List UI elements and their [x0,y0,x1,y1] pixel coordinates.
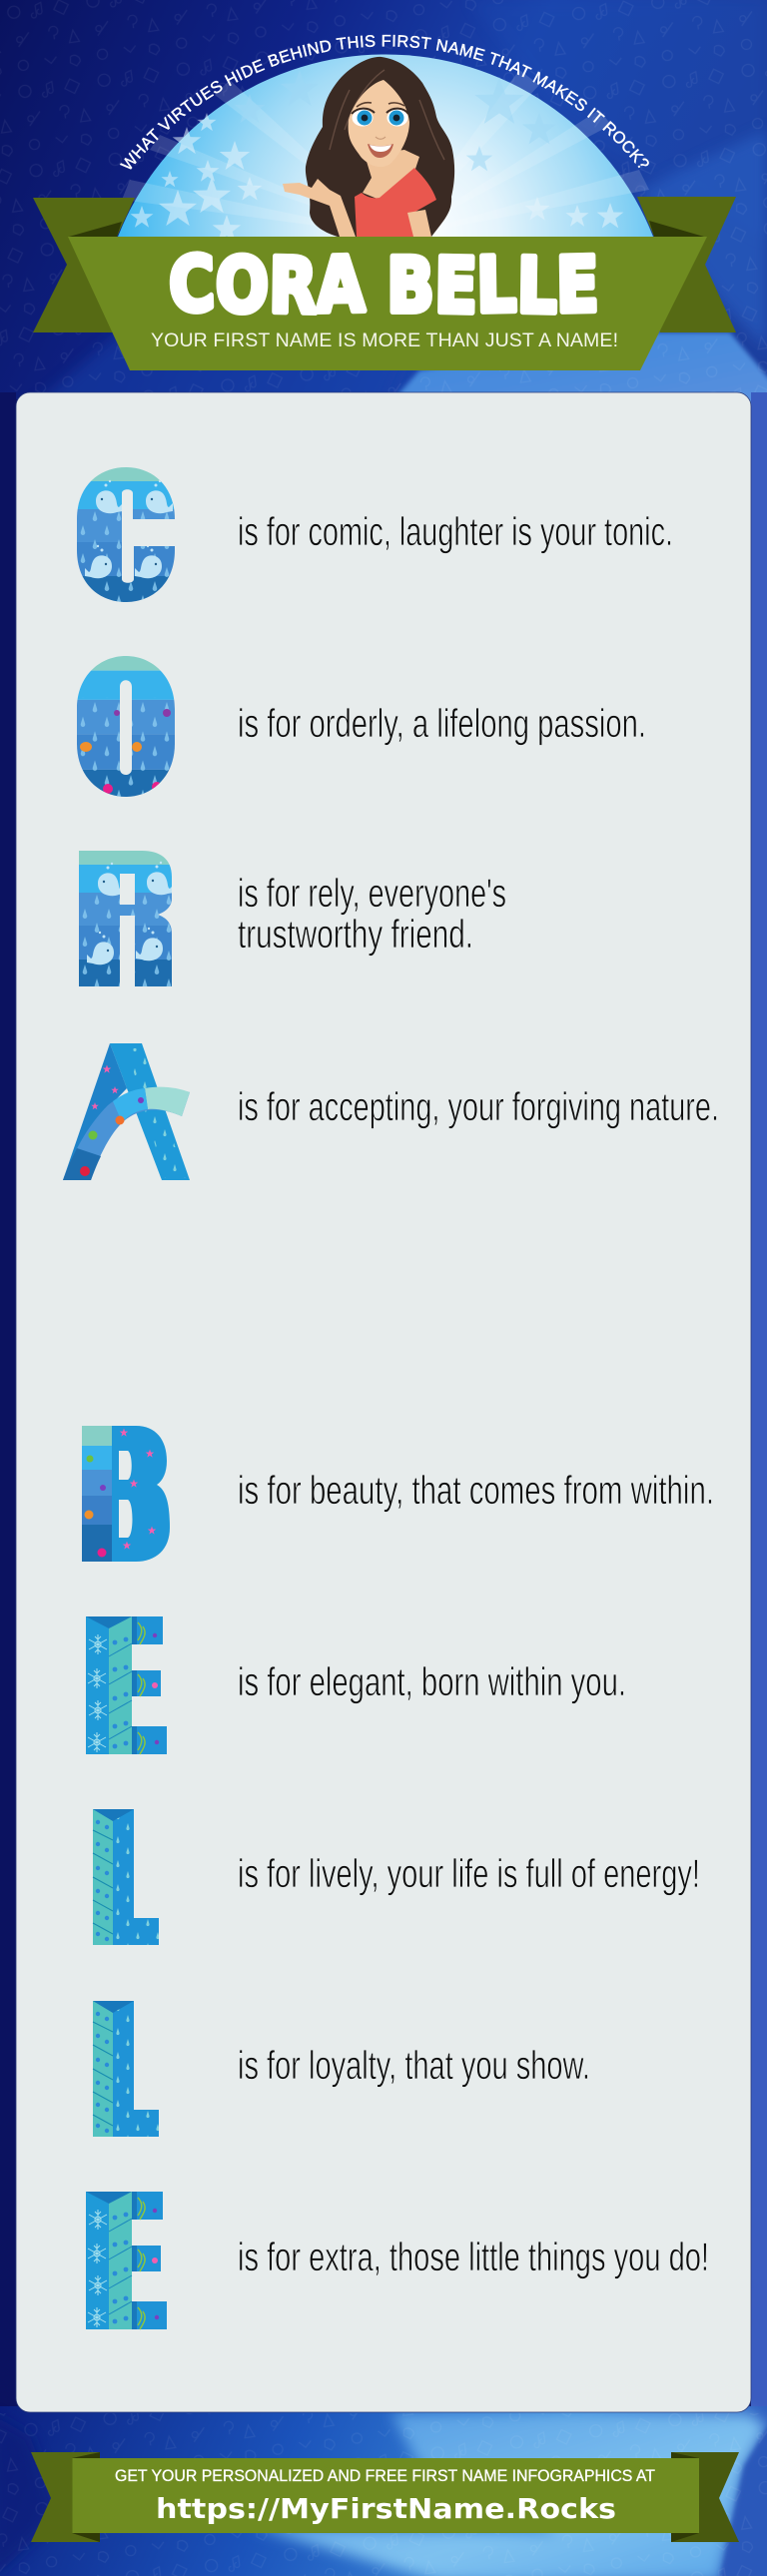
letter E [86,1616,167,1754]
face [349,80,409,167]
smile [368,137,393,158]
letter B [82,1426,170,1562]
letter L [93,1809,159,1945]
letter E (second) [86,2192,167,2329]
text: L second: is for loyalty, that you show. [238,2044,590,2088]
ribbon: back pieces [33,197,736,332]
raised hand [283,179,356,237]
letter L (second) [93,2001,159,2137]
letter C [77,467,175,602]
panel: letters [16,392,751,2412]
coral top [355,168,436,237]
arched tagline: WHAT VIRTUES HIDE BEHIND THIS FIRST NAME THAT MAKES IT ROCK? [120,34,649,170]
character: woman with long dark hair [283,57,454,237]
text: R: trustworthy friend. [238,913,473,957]
title: CORA BELLE [168,239,599,330]
letter R [79,851,172,986]
footer text line: GET YOUR PERSONALIZED AND FREE FIRST NAME INFOGRAPHICS AT [115,2467,655,2485]
ribbon: main banner [68,237,707,370]
footer ribbon [31,2452,739,2542]
eyes [352,103,408,126]
letter O [77,656,175,797]
text: R: is for rely, everyone's [238,872,506,916]
neck and chest [363,150,419,200]
footer url: https://MyFirstName.Rocks [156,2492,616,2525]
letter A [63,1043,190,1180]
sunburst dome [118,54,653,242]
text: R [238,872,506,957]
text: E: is for elegant, born within you. [238,1660,626,1704]
subtitle: YOUR FIRST NAME IS MORE THAN JUST A NAME! [151,329,618,351]
